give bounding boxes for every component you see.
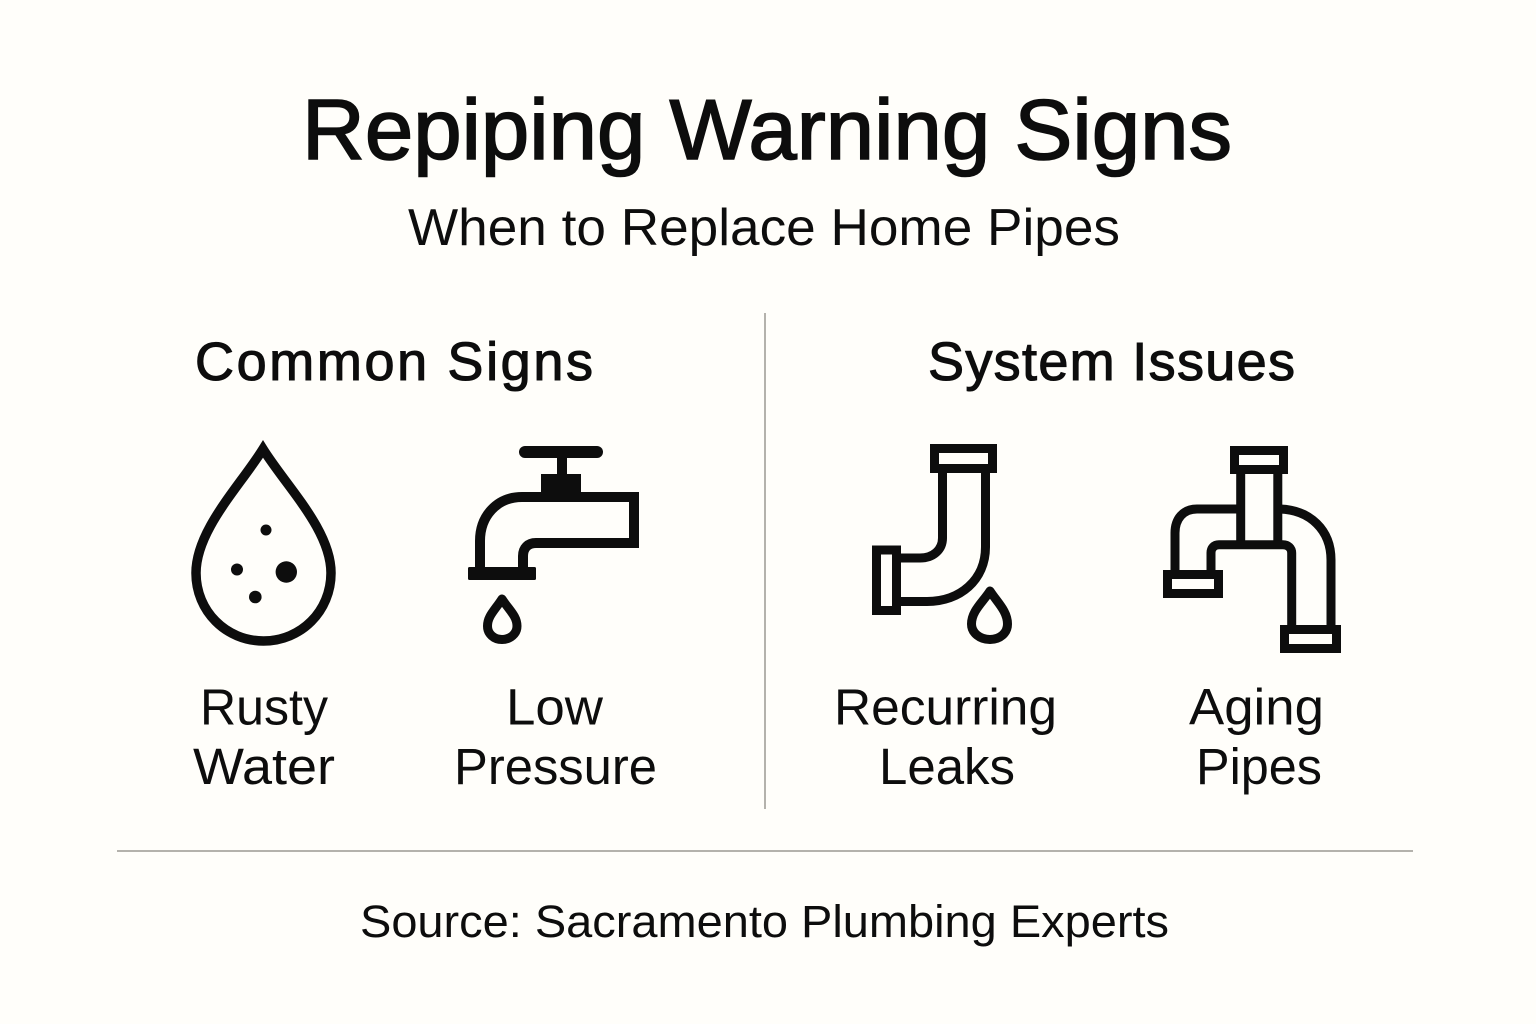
icon: faucet with drip [468,446,634,640]
icon: leaking elbow pipe [876,448,1008,640]
source note: Source: Sacramento Plumbing Experts [360,896,1169,947]
label: low pressure: Low [506,678,603,736]
heading: system issues: System Issues [928,332,1295,392]
label: low pressure: Pressure [454,738,657,795]
label: recurring leaks: Recurring [834,678,1057,736]
label: rusty water: Rusty [200,678,328,736]
label: aging pipes [1189,678,1324,795]
label: aging pipes: Aging [1189,678,1324,736]
label: rusty water [193,678,335,795]
label: low pressure [454,678,657,795]
label: recurring leaks: Leaks [879,738,1015,795]
title: Repiping Warning Signs [302,83,1232,178]
heading: common signs: Common Signs [195,332,593,392]
label: recurring leaks [834,678,1057,795]
subtitle: When to Replace Home Pipes [408,199,1120,257]
label: aging pipes: Pipes [1196,738,1322,795]
icon: rusty water drop [196,449,331,641]
icon: aging pipes [1168,450,1336,648]
label: rusty water: Water [193,738,335,795]
